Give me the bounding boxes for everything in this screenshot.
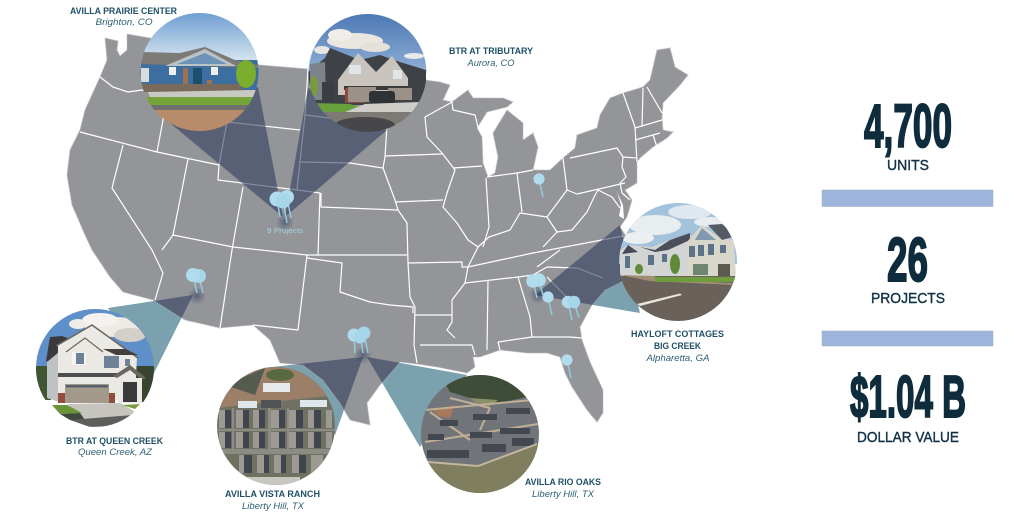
dark wedges over map (154, 87, 624, 410)
label: Hayloft Cottages Big Creek: BIG CREEK (654, 341, 701, 352)
stat: units (864, 92, 952, 174)
label: BTR at Queen Creek (66, 436, 163, 458)
stat: dollar value (850, 364, 966, 446)
label: Avilla Prairie Center: AVILLA PRAIRIE CENTER (70, 6, 177, 17)
label: Avilla Rio Oaks: Liberty Hill, TX (532, 489, 595, 500)
map: United States (67, 34, 688, 425)
divider bar 1 (822, 190, 993, 206)
label: Avilla Prairie Center (70, 6, 177, 28)
pins: Arizona (186, 268, 206, 293)
photo: Avilla Rio Oaks (420, 374, 540, 494)
label: 9 Projects: 9 Projects (267, 226, 303, 235)
stat: units: 4,700 (864, 92, 952, 160)
photo: Avilla Vista Ranch (216, 366, 336, 486)
label: BTR at Queen Creek: Queen Creek, AZ (78, 447, 153, 458)
photo: BTR at Tributary (308, 13, 428, 134)
label: Hayloft Cottages Big Creek (631, 329, 725, 364)
label: Avilla Vista Ranch: Liberty Hill, TX (242, 501, 305, 512)
label: BTR at Tributary: Aurora, CO (467, 58, 515, 69)
label: Avilla Prairie Center: Brighton, CO (96, 17, 153, 28)
label: BTR at Tributary (449, 46, 534, 69)
photo: BTR at Queen Creek (35, 308, 156, 429)
label: Avilla Vista Ranch: AVILLA VISTA RANCH (225, 489, 320, 500)
label: BTR at Queen Creek: BTR AT QUEEN CREEK (66, 436, 163, 447)
label: Avilla Rio Oaks (525, 477, 602, 500)
teal wedges on white background (108, 230, 640, 447)
photo: Avilla Prairie Center (140, 12, 260, 134)
stat: projects: 26 (887, 226, 928, 295)
label: BTR at Tributary: BTR AT TRIBUTARY (449, 46, 534, 57)
label: Hayloft Cottages Big Creek: Alpharetta, GA (645, 353, 710, 364)
Long Island (643, 148, 657, 158)
label: Hayloft Cottages Big Creek: HAYLOFT COTTAGES (631, 329, 725, 340)
pins: Colorado cluster (270, 190, 294, 223)
state borders (80, 65, 662, 363)
pins: Georgia and South Carolina (526, 273, 580, 320)
stat: dollar value: DOLLAR VALUE (857, 430, 959, 446)
label: Avilla Vista Ranch (225, 489, 320, 512)
pins: Texas (348, 326, 370, 353)
stat: units: UNITS (887, 158, 929, 174)
label: Avilla Rio Oaks: AVILLA RIO OAKS (525, 477, 602, 488)
stat: projects (871, 226, 945, 307)
divider bar 2 (822, 331, 993, 346)
Chesapeake Bay (617, 192, 624, 219)
pin: Ohio (533, 173, 545, 197)
map pin shadows (188, 213, 547, 364)
photo: Hayloft Cottages Big Creek (618, 202, 738, 323)
pin: Florida (561, 354, 573, 378)
stat: projects: PROJECTS (871, 291, 945, 307)
